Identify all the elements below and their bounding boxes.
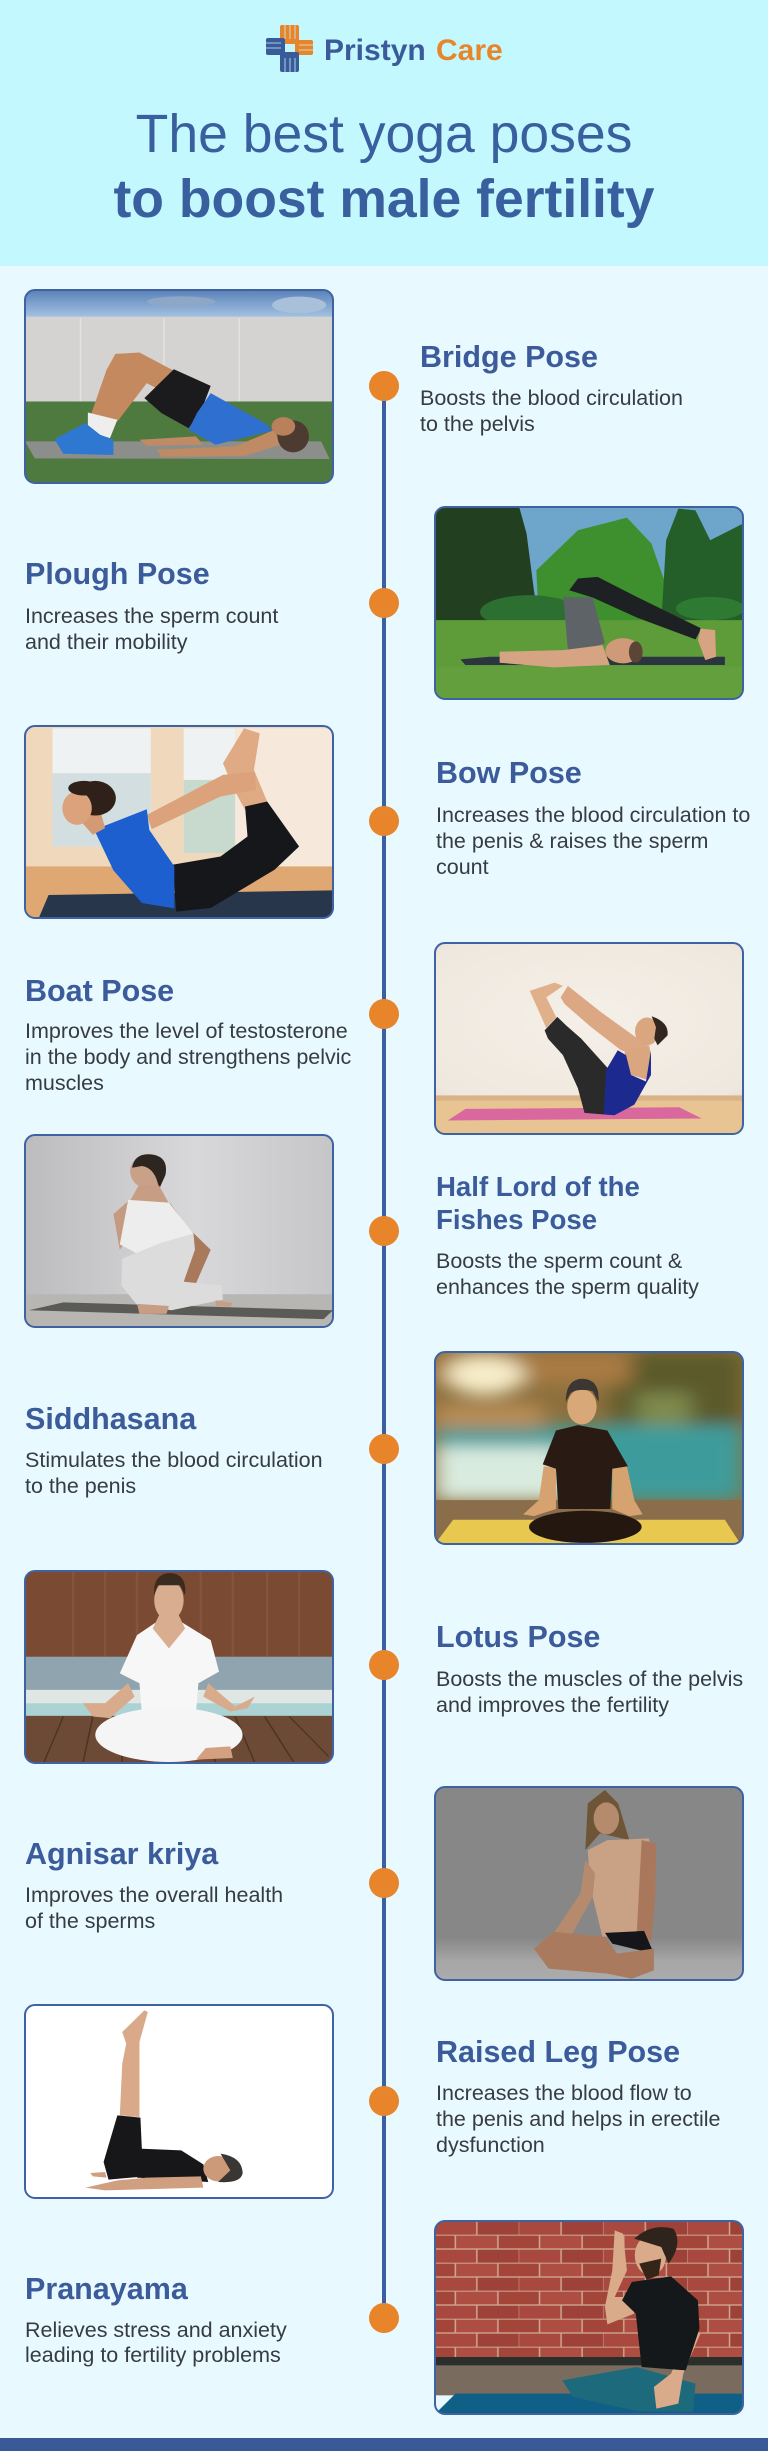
block: half lord of the fishes pose: Boosts the sperm count & [436,1249,682,1273]
heading: bridge pose: Boosts the blood circulation [420,386,683,410]
block: half lord of the fishes pose: enhances the sperm quality [436,1275,699,1299]
image frame: raised leg pose [25,2005,333,2198]
timeline dots [369,371,399,2333]
block: half lord of the fishes pose: Fishes Pose [436,1204,597,1235]
image: boat pose [435,943,743,1134]
block: bow pose [436,756,750,879]
image frame: siddhasana [435,1352,743,1544]
block: bow pose: the penis & raises the sperm [436,829,708,853]
block: siddhasana: to the penis [25,1474,136,1498]
logo: Pristyn Care [266,25,426,72]
image frame: boat pose [435,943,743,1134]
image frame: agnisar kriya [435,1787,743,1980]
block: plough pose: Plough Pose [25,557,210,591]
header band [0,0,768,266]
image frame: pranayama [435,2221,743,2414]
block: agnisar kriya [25,1837,283,1933]
image: bridge pose [25,290,333,483]
heading: bridge pose: Bridge Pose [420,340,598,374]
timeline line [382,386,386,2318]
block: pranayama [25,2272,287,2367]
image: agnisar kriya [435,1787,743,1980]
block: boat pose: Improves the level of testosterone [25,1019,348,1043]
footer band [0,2438,768,2451]
block: siddhasana: Siddhasana [25,1402,197,1436]
block: boat pose: in the body and strengthens pelvic [25,1045,352,1069]
block: raised leg pose [436,2035,720,2157]
image frame: bridge pose [25,290,333,483]
block: pranayama: leading to fertility problems [25,2343,281,2367]
image: half lord of the fishes pose [25,1135,333,1327]
logo wordmark: Care: Care [436,34,503,67]
title: to boost male fertility [113,170,655,229]
block: bow pose: Increases the blood circulation to [436,803,750,827]
block: pranayama: Relieves stress and anxiety [25,2318,287,2342]
block: lotus pose: Boosts the muscles of the pelvis [436,1667,743,1691]
block: bow pose: Bow Pose [436,756,582,790]
block: raised leg pose: dysfunction [436,2133,545,2157]
block: lotus pose [436,1620,743,1717]
image frame: bow pose [25,726,333,918]
image: plough pose [435,507,744,699]
image: bow pose [25,726,333,918]
block: agnisar kriya: Improves the overall health [25,1883,283,1907]
block: raised leg pose: Increases the blood flow to [436,2081,692,2105]
image: lotus pose [25,1571,333,1763]
block: bow pose: count [436,855,489,879]
title: The best yoga poses [136,105,632,164]
heading: bridge pose: to the pelvis [420,412,535,436]
block: half lord of the fishes pose: Half Lord of the [436,1171,640,1202]
block: agnisar kriya: of the sperms [25,1909,155,1933]
block: siddhasana [25,1402,323,1498]
image: pranayama [435,2221,743,2414]
block: raised leg pose: the penis and helps in erectile [436,2107,720,2131]
image: raised leg pose [25,2005,333,2198]
image frame: lotus pose [25,1571,333,1763]
block: plough pose [25,557,278,654]
image: siddhasana [435,1352,743,1544]
block: half lord of the fishes pose [436,1171,699,1299]
image frame: plough pose [435,507,743,699]
logo wordmark: Pristyn [324,34,426,67]
block: pranayama: Pranayama [25,2272,189,2306]
block: plough pose: and their mobility [25,630,188,654]
title [113,105,655,229]
block: boat pose [25,974,352,1095]
block: lotus pose: and improves the fertility [436,1693,669,1717]
block: plough pose: Increases the sperm count [25,604,278,628]
block: boat pose: muscles [25,1071,104,1095]
block: siddhasana: Stimulates the blood circulation [25,1448,323,1472]
block: lotus pose: Lotus Pose [436,1620,600,1654]
block: agnisar kriya: Agnisar kriya [25,1837,219,1871]
icon: cross mark [266,25,313,72]
image frame: half lord of the fishes pose [25,1135,333,1327]
block: boat pose: Boat Pose [25,974,174,1008]
heading: bridge pose [420,340,683,436]
block: raised leg pose: Raised Leg Pose [436,2035,680,2069]
